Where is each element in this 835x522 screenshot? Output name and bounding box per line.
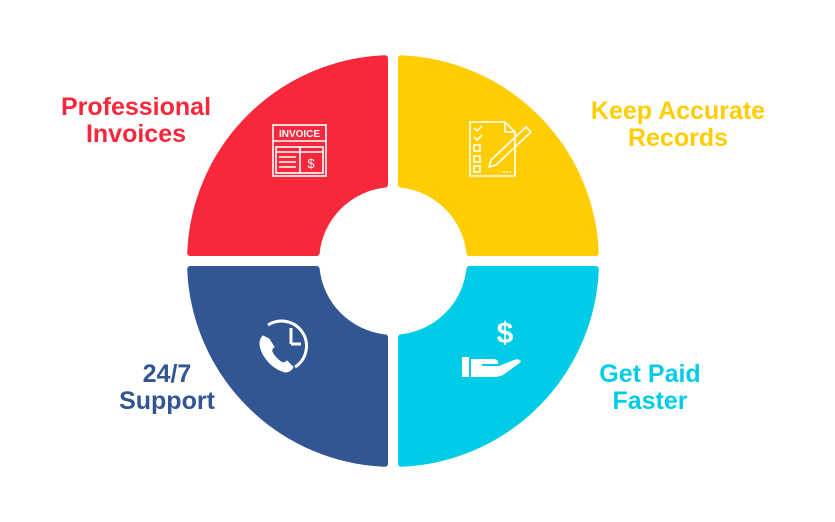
- label: Get Paid Faster: Faster: [612, 387, 688, 415]
- icon: records checklist: [470, 122, 531, 176]
- icon: hand with dollar: $: [497, 317, 514, 350]
- label: Keep Accurate Records: [591, 97, 765, 152]
- segment: yellow top-right: [401, 58, 596, 253]
- segment: blue bottom-left: [190, 269, 385, 464]
- icon: hand with dollar: [462, 317, 521, 377]
- label: Professional Invoices: Invoices: [86, 120, 186, 148]
- segment: cyan bottom-right: [401, 269, 596, 464]
- label: 24/7 Support: Support: [119, 387, 215, 415]
- icon: phone clock: [260, 321, 306, 372]
- label: Professional Invoices: Professional: [61, 93, 211, 121]
- segment: red top-left: [190, 58, 385, 253]
- label: Keep Accurate Records: Keep Accurate: [591, 97, 765, 125]
- label: 24/7 Support: 24/7: [143, 360, 191, 388]
- label: Professional Invoices: [61, 93, 211, 148]
- icon: invoice: [273, 125, 326, 176]
- label: 24/7 Support: [119, 360, 215, 415]
- icon: invoice: INVOICE: [279, 129, 320, 140]
- label: Get Paid Faster: Get Paid: [599, 360, 701, 388]
- icon: invoice: $: [307, 156, 315, 171]
- label: Keep Accurate Records: Records: [628, 124, 728, 152]
- label: Get Paid Faster: [599, 360, 701, 415]
